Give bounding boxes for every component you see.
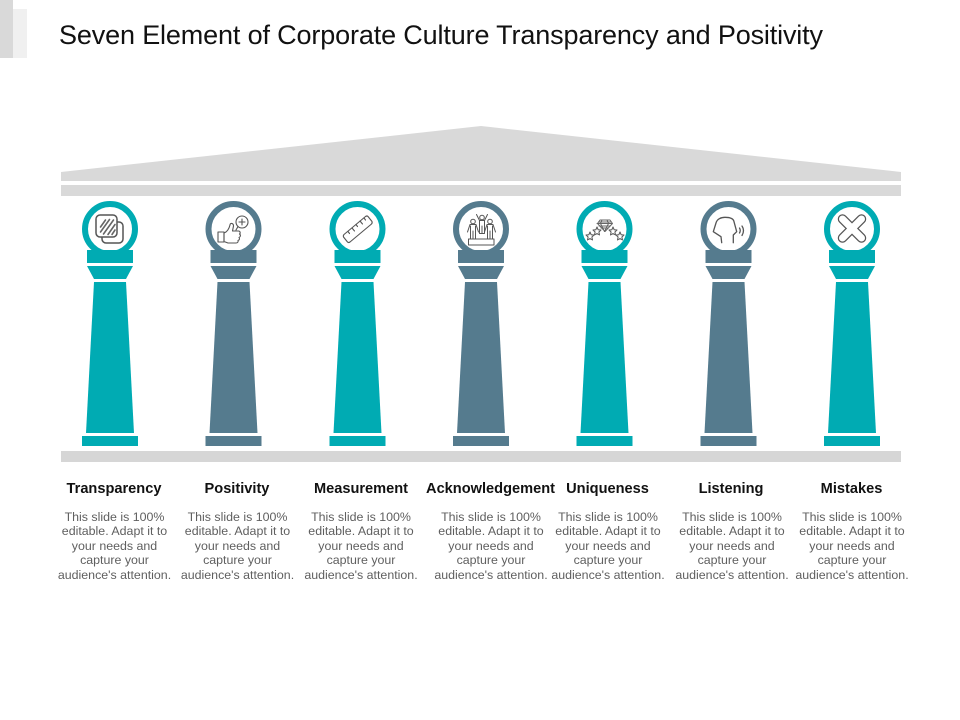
label: Transparency: capture your (80, 553, 149, 567)
icon: cross (842, 219, 862, 238)
label: Mistakes: your needs and (809, 539, 895, 553)
label: Mistakes: Mistakes (821, 481, 882, 497)
label: Listening: capture your (698, 553, 766, 567)
pillar: Mistakes (824, 204, 880, 446)
label: Positivity: This slide is 100% (188, 510, 287, 524)
label: Positivity: your needs and (195, 539, 280, 553)
label: Acknowledgement: Acknowledgement (426, 481, 555, 497)
label: Positivity: editable. Adapt it to (185, 524, 290, 538)
label: Acknowledgement: audience's attention. (434, 568, 548, 582)
label: Transparency: your needs and (72, 539, 157, 553)
pillar: Uniqueness (576, 204, 632, 446)
label: Listening: your needs and (689, 539, 775, 553)
icon: thumbs up with plus (218, 216, 248, 243)
label: Mistakes: capture your (818, 553, 886, 567)
pillar: Transparency (82, 204, 138, 446)
pillar: Positivity (206, 204, 262, 446)
corner accent (0, 0, 27, 58)
label: Measurement: editable. Adapt it to (308, 524, 414, 538)
label: Acknowledgement (426, 481, 555, 582)
label: Uniqueness: your needs and (565, 539, 651, 553)
label: Positivity: audience's attention. (181, 568, 294, 582)
label: Uniqueness: audience's attention. (551, 568, 665, 582)
temple beam (61, 185, 901, 196)
label: Acknowledgement: This slide is 100% (441, 510, 541, 524)
label: Mistakes (795, 481, 909, 582)
label: Listening (675, 481, 789, 582)
label: Uniqueness (551, 481, 665, 582)
label: Transparency: editable. Adapt it to (62, 524, 167, 538)
icon: diamond and stars (586, 220, 624, 240)
label: Listening: This slide is 100% (682, 510, 782, 524)
label: Transparency: audience's attention. (58, 568, 171, 582)
label: Positivity: capture your (203, 553, 272, 567)
label: Positivity: Positivity (205, 481, 270, 497)
icon: ruler (343, 216, 372, 242)
label: Measurement: This slide is 100% (311, 510, 411, 524)
icon: head with sound waves (713, 217, 744, 243)
label: Transparency: Transparency (67, 481, 162, 497)
label: Positivity (181, 481, 294, 582)
label: Acknowledgement: your needs and (448, 539, 534, 553)
label: Mistakes: editable. Adapt it to (799, 524, 905, 538)
label: Uniqueness: Uniqueness (566, 481, 649, 497)
label: Mistakes: This slide is 100% (802, 510, 902, 524)
temple floor (61, 451, 901, 462)
label: Measurement (304, 481, 418, 582)
label: Uniqueness: This slide is 100% (558, 510, 658, 524)
label: Transparency: This slide is 100% (65, 510, 164, 524)
title: Seven Element of Corporate Culture Transparency and Positivity (59, 20, 824, 50)
label: Listening: audience's attention. (675, 568, 789, 582)
pillar: Listening (700, 204, 756, 446)
label: Transparency (58, 481, 171, 582)
icon: people on podium (468, 214, 496, 245)
icon: overlapping squares (96, 215, 123, 243)
label: Measurement: your needs and (318, 539, 404, 553)
label: Measurement: capture your (327, 553, 395, 567)
label: Measurement: audience's attention. (304, 568, 418, 582)
label: Measurement: Measurement (314, 481, 408, 497)
label: Acknowledgement: editable. Adapt it to (438, 524, 544, 538)
label: Mistakes: audience's attention. (795, 568, 909, 582)
label: Acknowledgement: capture your (457, 553, 525, 567)
pillar: Acknowledgement (453, 204, 509, 446)
label: Listening: Listening (699, 481, 763, 497)
label: Uniqueness: capture your (574, 553, 642, 567)
label: Uniqueness: editable. Adapt it to (555, 524, 661, 538)
temple roof (61, 126, 901, 181)
label: Listening: editable. Adapt it to (679, 524, 785, 538)
pillar: Measurement (330, 204, 386, 446)
